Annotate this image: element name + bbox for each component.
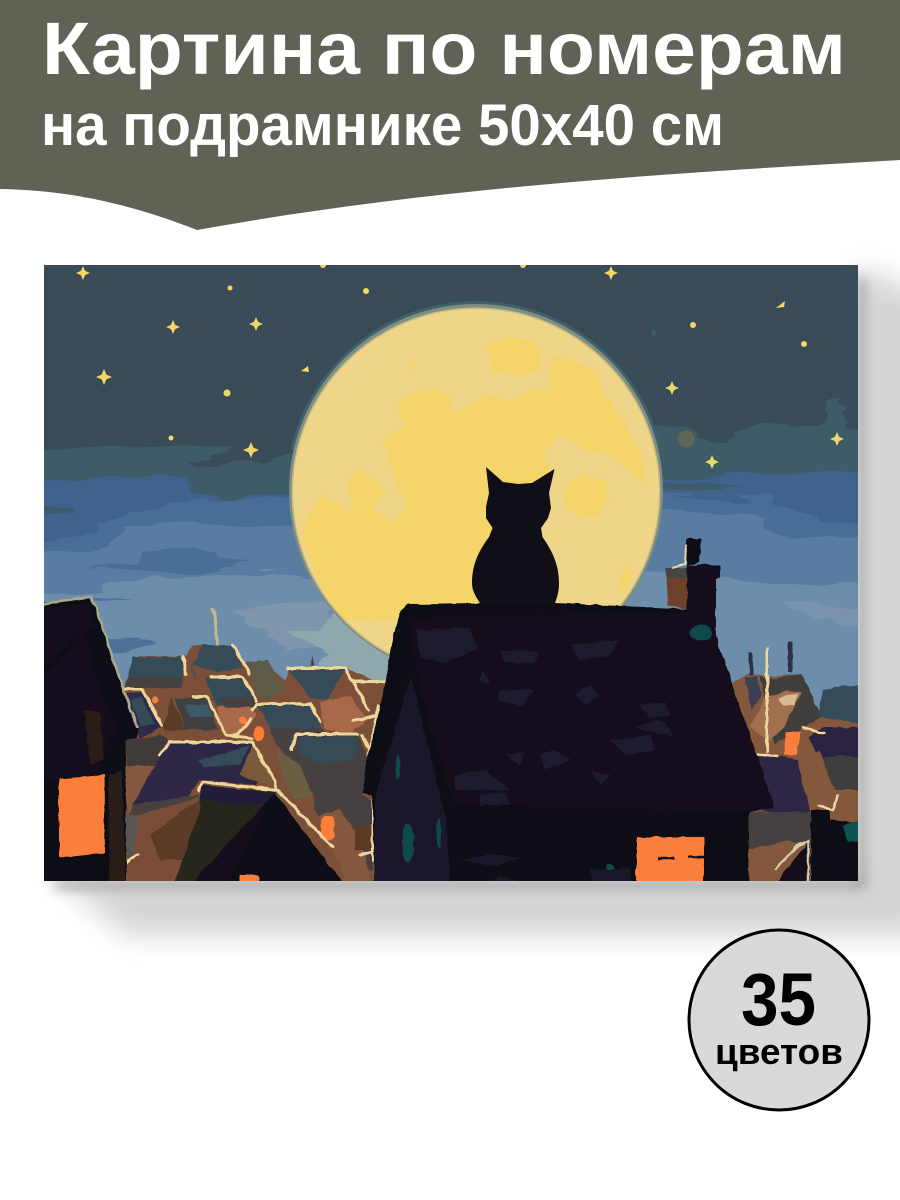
- rooftop highlights: [123, 645, 385, 865]
- gable wall: [373, 677, 451, 895]
- chimney: [666, 538, 720, 641]
- lit window: [59, 775, 105, 858]
- painting: cat on roof under full moon: [44, 265, 858, 881]
- lit window: [635, 836, 704, 881]
- subtitle: на подрамнике 50х40 см: [41, 93, 724, 158]
- full moon: [286, 301, 666, 681]
- header banner: [0, 0, 900, 230]
- moon craters: [303, 337, 645, 620]
- badge: 35 colours: 35: [741, 958, 816, 1041]
- distant rooftops right: [732, 642, 880, 895]
- title: Картина по номерам: [42, 7, 846, 90]
- badge: 35 colours: [689, 930, 869, 1110]
- stars: [76, 262, 844, 469]
- distant rooftops left: [122, 608, 390, 895]
- teal accents: [396, 754, 614, 876]
- front gable: [194, 794, 342, 881]
- left foreground house: [44, 596, 140, 881]
- badge: 35 colours: цветов: [715, 1031, 843, 1072]
- canvas drop shadow: [50, 265, 900, 935]
- town and houses: [20, 538, 880, 895]
- roof shingles: [410, 612, 773, 811]
- main house silhouette: [362, 538, 773, 895]
- night sky: [44, 265, 858, 712]
- cat silhouette: [472, 467, 559, 604]
